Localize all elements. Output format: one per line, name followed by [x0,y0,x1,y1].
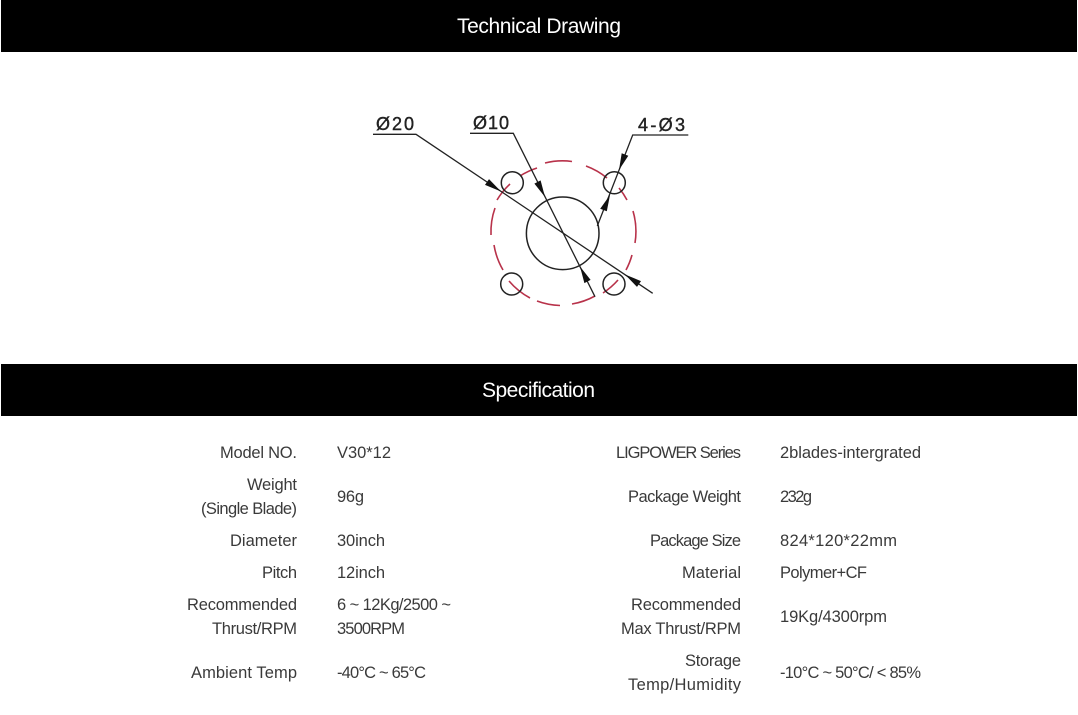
specification table: left values: 30inch [337,532,385,550]
leader line: diameter 10 [470,113,595,297]
specification table: left values [337,444,451,682]
specification table: right labels: Package Weight [628,488,741,506]
specification table: right labels: Recommended [631,596,741,614]
specification table: left labels: Diameter [230,532,298,550]
specification table: right labels: Package Size [650,532,741,550]
specification table: left labels: Ambient Temp [191,664,297,682]
leader line: diameter 10: Ø10 [473,113,509,133]
specification table: right labels: LIGPOWER Series [616,444,741,462]
header bar: Technical Drawing [1,0,1077,52]
specification table: right values: 2blades-intergrated [780,444,921,462]
specification table: right values: Polymer+CF [780,564,867,582]
specification table: left labels: (Single Blade) [201,500,297,518]
specification table: right labels: Material [682,564,741,582]
specification table: left values: 96g [337,488,364,506]
specification table: left labels [187,444,298,682]
leader line: diameter 20 [373,114,653,293]
hub and mounting holes [501,172,625,295]
dashed red bolt circle [491,161,636,306]
header bar: Specification: Specification [482,379,595,402]
specification table: right labels: Storage [685,652,741,670]
specification table: right labels [616,444,742,694]
specification table: left values: V30*12 [337,444,391,462]
header bar: Technical Drawing: Technical Drawing [457,15,621,38]
specification table: left labels: Model NO. [220,444,297,462]
specification table: right values: 19Kg/4300rpm [780,608,887,626]
specification table: right values: -10°C ~ 50°C/ < 85% [780,664,921,682]
header bar: Specification [1,364,1077,416]
specification table: left labels: Thrust/RPM [212,620,297,638]
leader line: diameter 20: Ø20 [376,114,414,134]
specification table: left labels: Pitch [262,564,297,582]
specification table: left values: -40°C ~ 65°C [337,664,426,682]
technical drawing: propeller hub hole pattern [373,113,688,306]
specification table: right labels: Max Thrust/RPM [621,620,741,638]
specification table: right values: 232g [780,488,812,506]
specification table: right values [780,444,921,682]
leader line: 4 holes diameter 3: 4-Ø3 [638,115,685,135]
specification table: right values: 824*120*22mm [780,532,897,550]
specification table: right labels: Temp/Humidity [628,676,742,694]
specification table: left values: 6 ~ 12Kg/2500 ~ [337,596,451,614]
specification table: left values: 3500RPM [337,620,405,638]
leader line: 4 holes diameter 3 [597,115,688,226]
specification table: left labels: Weight [247,476,297,494]
specification table: left labels: Recommended [187,596,297,614]
specification table: left values: 12inch [337,564,385,582]
